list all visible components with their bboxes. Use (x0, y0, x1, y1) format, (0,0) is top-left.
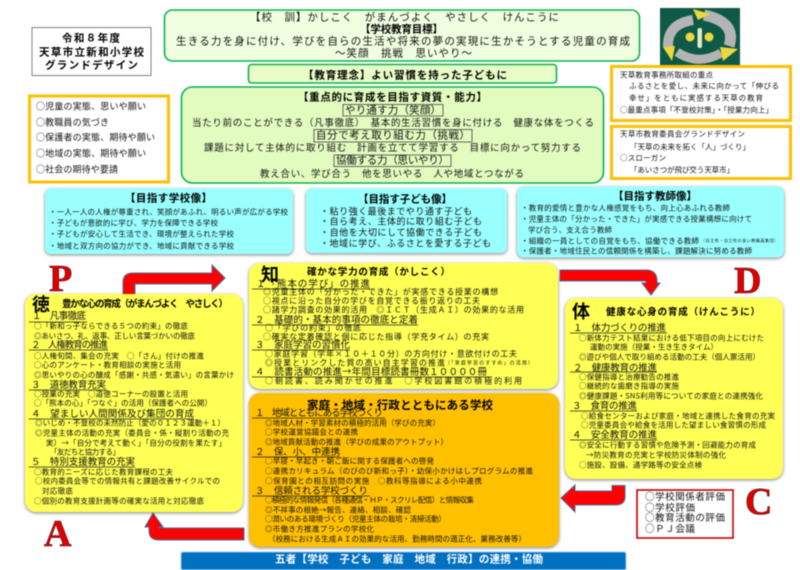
list: moral education items: ◎いじめ・不登校の未然防止（愛の０１２３運動＋１） (35, 418, 225, 428)
icon character: chi: 知 (261, 261, 279, 287)
list: moral education items: ○「熊本の心」「つなぐ」の活用（保護者への公開） (34, 398, 212, 408)
list: moral education items: ◎あいさつ、礼、返事、正しい言葉づかいの徹底 (34, 330, 196, 342)
panel: sources of needs: ○保護者の実態、期待や願い (36, 130, 155, 144)
panel: sources of needs: ○教職員の気づき (36, 116, 109, 128)
list: academic items (252, 276, 533, 386)
panel: priority qualities and abilities: 【重点的に育成を目指す資質・能力】 (298, 90, 487, 104)
banner: five-party collaboration (181, 552, 626, 570)
letter P: P (49, 258, 72, 300)
panel: priority qualities and abilities: 課題に対して主体的に取り組む 計画を立てて学習する 目標に向かって努力する (204, 140, 581, 154)
list: health items: →防災教育の充実と学校防災体制の強化 (586, 450, 726, 460)
panel: ideal school (45, 188, 293, 254)
panel: academic ability (249, 261, 558, 389)
panel: ideal school: ・一人一人の人権が尊重され、笑顔があふれ、明るい声が広がる学校 (49, 206, 288, 218)
title box (32, 28, 151, 76)
list: moral education items: 対応徹底 (42, 486, 74, 496)
panel: ideal teacher: ・保護者・地域住民との信頼関係を構築し、課題解決に努める教師 (521, 246, 752, 256)
list: academic items: １「熊本の学び」の推進 (256, 276, 370, 290)
panel: educational philosophy: 【教育理念】よい習慣を持った子どもに (303, 68, 507, 82)
panel: ideal school: ・子どもが意欲的に学び、学力を保障できる学校 (49, 218, 218, 228)
list: health items (570, 320, 776, 470)
list: community items: ◎市働き方推進プランの学校化 (265, 524, 374, 534)
panel: sources of needs (30, 96, 168, 182)
list: health items: ◎遊びや個人で取り組める活動の工夫（個人票活用） (579, 352, 760, 362)
panel: Amakusa education office priorities: ○最重点事項「不登校対策」・「授業力向上」 (620, 104, 773, 116)
panel: ideal child: 【目指す子ども像】 (358, 192, 452, 206)
panel: priority qualities and abilities: 教え合い、学び合う 他を思いやる 人や地域とつながる (260, 166, 524, 180)
list: moral education items: ○教育的ニーズに応じた教育課程の工夫 (34, 466, 174, 478)
panel: ideal school: 【目指す学校像】 (125, 190, 212, 206)
heading: health: 健康な心身の育成（けんこうに） (606, 304, 760, 318)
panel: ideal teacher: （自主性・自立性の高い教職員集団） (701, 237, 778, 244)
letter D: D (734, 260, 761, 302)
banner: five-party collaboration: 五者【学校 子ども 家庭 地域 行政】の連携・協働 (275, 552, 544, 566)
panel: sources of needs: ○児童の実態、思いや願い (36, 100, 146, 112)
list: community items: ○潤いのある環境づくり（児童主体の栽培・清掃活動） (265, 514, 446, 524)
panel: ideal child: ・自ら考え、主体的に取り組む子ども (320, 214, 482, 228)
list: moral education items: １ 凡事徹底 (32, 308, 86, 322)
panel: priority qualities and abilities (182, 87, 604, 183)
list: moral education items: ○「新和っ子ならできる５つの約束」の徹底 (34, 320, 188, 332)
panel: priority qualities and abilities: 協働する力（思いやり） (336, 152, 449, 168)
panel: evaluation methods: ○学校評価 (645, 500, 695, 514)
panel: family, community, administration (249, 393, 559, 547)
list: health items: ○施設、設備、通学路等の安全点検 (579, 460, 702, 470)
list: community items: ◎地域貢献活動の推進（学びの成果のアウトプット） (265, 436, 448, 448)
list: community items (252, 405, 534, 544)
list: health items: ○継続的な歯磨き指導の実施 (579, 380, 680, 392)
panel: ideal child: ・粘り強く最後までやり通す子ども (320, 204, 472, 218)
heading: school with community: 家庭・地域・行政とともにある学校 (307, 397, 494, 413)
heading: moral education: 豊かな心の育成（がまんづよく やさしく） (62, 296, 228, 310)
list: academic items: ○朝読書、読み聞かせの推進 ○学校図書館の積極的利用 (265, 376, 522, 386)
panel: sources of needs: ○社会の期待や要請 (36, 162, 118, 176)
panel: Amakusa city board grand design (612, 126, 790, 178)
list: community items: ○学校運営協議会との連携 (265, 426, 358, 438)
list: community items: （校務における生成ＡＩの効果的な活用、勤務時間の適正化、業務改善等） (268, 534, 526, 544)
panel: Amakusa city board grand design: ○スローガン (620, 152, 666, 164)
list: moral education items: ５ 特別支援教育の充実 (31, 454, 135, 468)
list: academic items: ○「学びの約束」の徹底 (265, 322, 361, 334)
title box: グランドデザイン (45, 58, 138, 72)
list: community items: ３ 信頼される学校づくり (255, 483, 368, 497)
panel: evaluation methods (637, 489, 733, 538)
panel: evaluation methods: ○教育活動の評価 (645, 510, 725, 524)
panel: ideal child: ・地域に学び、ふるさとを愛する子ども (320, 236, 491, 250)
list: academic items: ○視点に沿った自分の学びを自覚できる振り返りの工夫 (263, 296, 480, 306)
panel: Amakusa city board grand design: 「あいさつが飛び交う天草市」 (630, 164, 734, 176)
icon character: tai: 体 (572, 298, 590, 324)
list: moral education items: 実）→「自分で考えて動く」「自分の役割を果たす」 (46, 438, 226, 448)
arrow: act to plan (145, 513, 244, 540)
list: moral education items: ○人権旬間、集会の充実 ○「さん」付けの推進 (34, 350, 204, 362)
letter A: A (44, 513, 72, 555)
panel: ideal teacher: 【目指す教師像】 (613, 188, 697, 204)
list: community items: ◎地域人材・学習素材の積極的活用（学びの充実） (265, 418, 440, 428)
list: academic items: ◎児童主体の「分かった・できた」が実感できる授業の構想 (263, 286, 498, 298)
list: community items: ○保育園との相互訪問の実施 ○教科等指導による小中連携 (265, 476, 482, 486)
title box: 天草市立新和小学校 (39, 44, 144, 60)
panel: school motto and goal: ～笑顔 挑戦 思いやり～ (335, 46, 472, 60)
list: health items: ○給食センターおよび家庭・地域と連携した食育の充実 (581, 410, 776, 422)
icon character: toku: 徳 (32, 291, 50, 317)
list: moral education items (29, 308, 234, 506)
list: health items: ３ 食育の推進 (572, 398, 637, 412)
list: academic items: ３ 家庭学習の習慣化 (255, 337, 350, 351)
list: academic items: ◎授業とリンクした質の高い自主学習の推進 (265, 358, 445, 368)
list: academic items: ○確実な定着確認と個に応じた指導（学充タイム）の充実 (263, 332, 489, 342)
list: health items: 運動の実施（授業・生き生きタイム） (590, 342, 718, 352)
panel: Amakusa education office priorities: 幸せ」をともに実感する天草の教育 (629, 92, 764, 104)
list: moral education items: 「友だちと協力する」 (50, 446, 120, 458)
panel: ideal child (306, 188, 507, 253)
list: health items: ◎健康課題・SNS利用等についての家庭との連携強化 (579, 390, 764, 402)
letter C: C (745, 481, 772, 523)
list: moral education items: ○心のアンケート・教育相談の実施と活用 (34, 360, 181, 370)
panel: ideal teacher: ・組織の一員としての自覚をもち、協働できる教師 (521, 236, 700, 246)
panel: ideal teacher (517, 186, 784, 258)
list: academic items: ４ 読書活動の推進→年間目標読書冊数１００００冊 (255, 364, 487, 378)
list: health items: ○新体力テスト結果における低下項目の向上にむけた (579, 332, 764, 344)
panel: health (565, 298, 783, 479)
list: moral education items: ２ 人権教育の推進 (31, 337, 108, 351)
panel: evaluation methods: ○ＰＪ会議 (645, 521, 695, 535)
list: moral education items: ◎児童主体の活動の充実（委員会・係・縦割り活動の充 (35, 428, 230, 438)
list: community items: ○積極的な情報発信（各種通信・ＨＰ・スクリレ配信）と情報収集 (265, 494, 474, 506)
panel: Amakusa education office priorities: 天草教育事務所取組の重点 (620, 70, 714, 80)
panel: school motto and goal: 生きる力を身に付け、学びを自らの生活や将来の夢の実現に生かそうとする児童の育成 (176, 34, 630, 48)
list: community items: １ 地域とともにある学校づくり (255, 405, 383, 419)
list: health items: ◎安全に行動する習慣や危険予測・回避能力の育成 (579, 440, 756, 450)
panel: Amakusa city board grand design: 「天草の未来を拓く「人」づくり」 (630, 142, 750, 152)
panel: priority qualities and abilities: やり通す力（笑顔） (345, 102, 441, 118)
list: health items: ○児童委員会や給食を活用した望ましい食習慣の形成 (581, 420, 766, 430)
arrow: plan to do (123, 265, 225, 296)
panel: Amakusa city board grand design: 天草市教育委員会グランドデザイン (620, 128, 745, 140)
panel: ideal teacher: ・児童主体の「分かった・できた」が実感できる授業構想に向けて (521, 214, 752, 224)
panel: educational philosophy (248, 64, 556, 83)
list: community items: ○早寝・早起き・朝ご飯に関する保護者への啓発 (265, 456, 434, 466)
list: community items: ◎不祥事の根絶→報告、連絡、相談、確認 (265, 504, 412, 516)
panel: sources of needs: ○地域の実態、期待や願い (36, 146, 146, 160)
panel: ideal child: ・自他を大切にして協働できる子ども (320, 226, 482, 238)
list: health items: １ 体力づくりの推進 (573, 320, 666, 334)
panel: school motto and goal: 【学校教育目標】 (360, 22, 443, 36)
panel: ideal school: ・地域と双方向の協力ができ、地域に貢献できる学校 (49, 240, 234, 252)
list: health items: ４ 安全教育の推進 (572, 427, 657, 441)
heading: academic ability: 確かな学力の育成（かしこく） (307, 264, 450, 278)
list: moral education items: ４ 望ましい人間関係及び集団の育成 (31, 406, 194, 420)
list: community items: ２ 保、小、中連携 (255, 444, 340, 458)
list: moral education items: ○校内委員会等での情報共有と課題改善サイクルでの (35, 476, 220, 486)
panel: school motto and goal: 【校 訓】かしこく がまんづよく やさしく けんこうに (250, 10, 559, 24)
list: community items: ○連携カリキュラム（のびのび新和っ子）・幼保小かけはしプログラムの推進 (265, 466, 534, 476)
panel: ideal teacher: ・教育的愛情と豊かな人権感覚をもち、向上心あふれる教師 (521, 202, 730, 214)
list: moral education items: ◎思いやりの心の醸成「感謝・共感・気遣い」の言葉かけ (34, 370, 234, 380)
panel: ideal teacher: 学び合う、支え合う教師 (528, 224, 612, 236)
list: academic items: ○諸学力調査の効果的活用 ◎ＩＣＴ（生成ＡＩ）の効果的な活用 (263, 304, 524, 316)
arrow: do to check (560, 270, 660, 295)
list: moral education items: ○個別の教育支援計画等の確実な活用と対応徹底 (34, 496, 204, 506)
list: health items: ○保健指導と治療勧告の推進 (579, 372, 680, 382)
panel: priority qualities and abilities: 当たり前のことができる（凡事徹底） 基本的生活習慣を身に付ける 健康な体をつくる (192, 115, 594, 129)
panel: ideal school: ・子どもが安心して生活でき、環境が整えられた学校 (49, 228, 234, 240)
panel: Amakusa education office priorities (612, 66, 790, 120)
title box: 令和８年度 (62, 30, 120, 46)
arrow: check to act (561, 485, 625, 512)
list: moral education items: ３ 道徳教育充実 (31, 377, 106, 391)
list: health items: ２ 健康教育の推進 (573, 360, 657, 374)
panel: priority qualities and abilities: 自分で考え取り組む力（挑戦） (316, 128, 470, 142)
list: academic items: ２ 基礎的・基本的事項の徹底と定着 (255, 312, 418, 326)
panel: evaluation methods: ○学校関係者評価 (645, 489, 725, 503)
panel: Amakusa education office priorities: ふるさとを愛し、未来に向かって「伸びる (629, 80, 779, 92)
list: academic items: ○家庭学習（学年×１０＋１０分）の方向付け・意欲付けの工夫 (265, 348, 517, 360)
panel: school motto and goal (164, 10, 640, 61)
icon: school emblem (660, 8, 740, 65)
list: moral education items: ○授業の充実 ○道徳コーナーの設置と活用 (34, 388, 188, 400)
list: academic items: （「家庭学習のすすめ」の活用） (445, 360, 533, 366)
panel: moral education (25, 291, 243, 512)
